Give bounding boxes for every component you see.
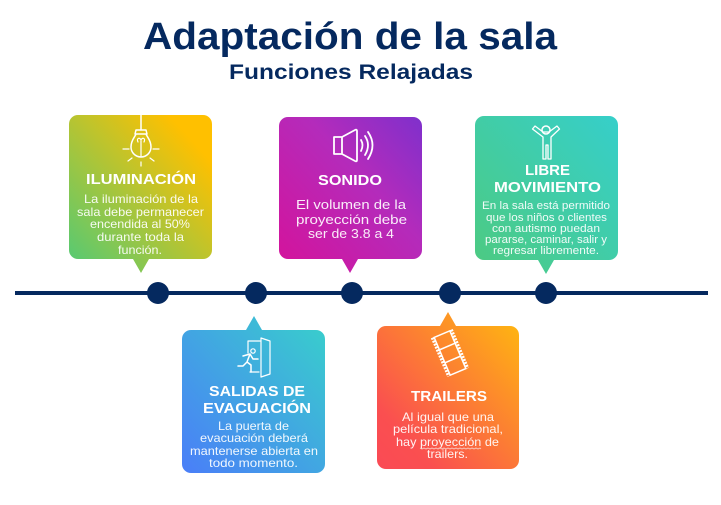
text: libre movimiento: pararse, caminar, salir y [485, 234, 608, 246]
text: sonido [296, 197, 407, 241]
icon: speaker [334, 130, 372, 161]
text: salidas de evacuación: mantenerse abierta en [190, 444, 318, 458]
icon: person with raised arms [532, 126, 560, 159]
text: sonido: El volumen de la [296, 197, 407, 212]
heading: libre movimiento: MOVIMIENTO [494, 179, 601, 196]
text: libre movimiento: que los niños o clientes [486, 212, 608, 224]
text: iluminación: función. [118, 243, 162, 257]
timeline [15, 282, 708, 304]
heading: sonido: SONIDO [318, 172, 382, 189]
panel: trailers [377, 312, 519, 469]
panel: sonido [279, 117, 422, 273]
text: trailers: Al igual que una [402, 410, 494, 424]
text: iluminación: durante toda la [97, 230, 184, 244]
text: trailers: trailers. [427, 447, 468, 461]
text: libre movimiento: con autismo puedan [492, 223, 600, 235]
callout bubble: libre movimiento [475, 116, 618, 274]
callout bubble: trailers [377, 312, 519, 469]
icon: emergency exit door [238, 338, 270, 377]
heading: libre movimiento [494, 162, 601, 196]
heading: salidas de evacuación: SALIDAS DE [209, 383, 305, 400]
subtitle: Funciones Relajadas [229, 61, 473, 84]
heading: iluminación: ILUMINACIÓN [86, 170, 196, 188]
text: salidas de evacuación: La puerta de [218, 419, 289, 433]
text: trailers [393, 410, 503, 461]
text: trailers: hay proyección de [396, 435, 499, 449]
spellcheck underline [420, 448, 481, 449]
text: trailers: película tradicional, [393, 422, 503, 436]
heading: salidas de evacuación [203, 383, 311, 417]
text: iluminación: encendida al 50% [90, 217, 190, 231]
text: libre movimiento: regresar libremente. [493, 245, 599, 257]
heading: libre movimiento: LIBRE [525, 162, 570, 179]
text: iluminación: La iluminación de la [84, 192, 198, 206]
title: Adaptación de la sala [143, 16, 558, 58]
icon: film strip [432, 330, 468, 376]
text: sonido: ser de 3.8 a 4 [308, 226, 394, 241]
text: iluminación [77, 192, 204, 257]
text: salidas de evacuación: evacuación deberá [200, 431, 308, 445]
icon: light bulb [123, 115, 159, 166]
callout bubble: salidas de evacuación [182, 316, 325, 473]
heading: salidas de evacuación: EVACUACIÓN [203, 399, 311, 417]
callout bubble: sonido [279, 117, 422, 273]
text: libre movimiento [482, 200, 610, 257]
panel: libre movimiento [475, 116, 618, 274]
heading: trailers: TRAILERS [411, 388, 487, 405]
text: salidas de evacuación: todo momento. [209, 456, 298, 470]
panel: iluminación [69, 115, 212, 273]
callout bubble: iluminación [69, 115, 212, 273]
text: sonido: proyección debe [296, 212, 407, 227]
panel: salidas de evacuación [182, 316, 325, 473]
text: iluminación: sala debe permanecer [77, 205, 204, 219]
text: salidas de evacuación [190, 419, 318, 470]
text: libre movimiento: En la sala está permitido [482, 200, 610, 212]
